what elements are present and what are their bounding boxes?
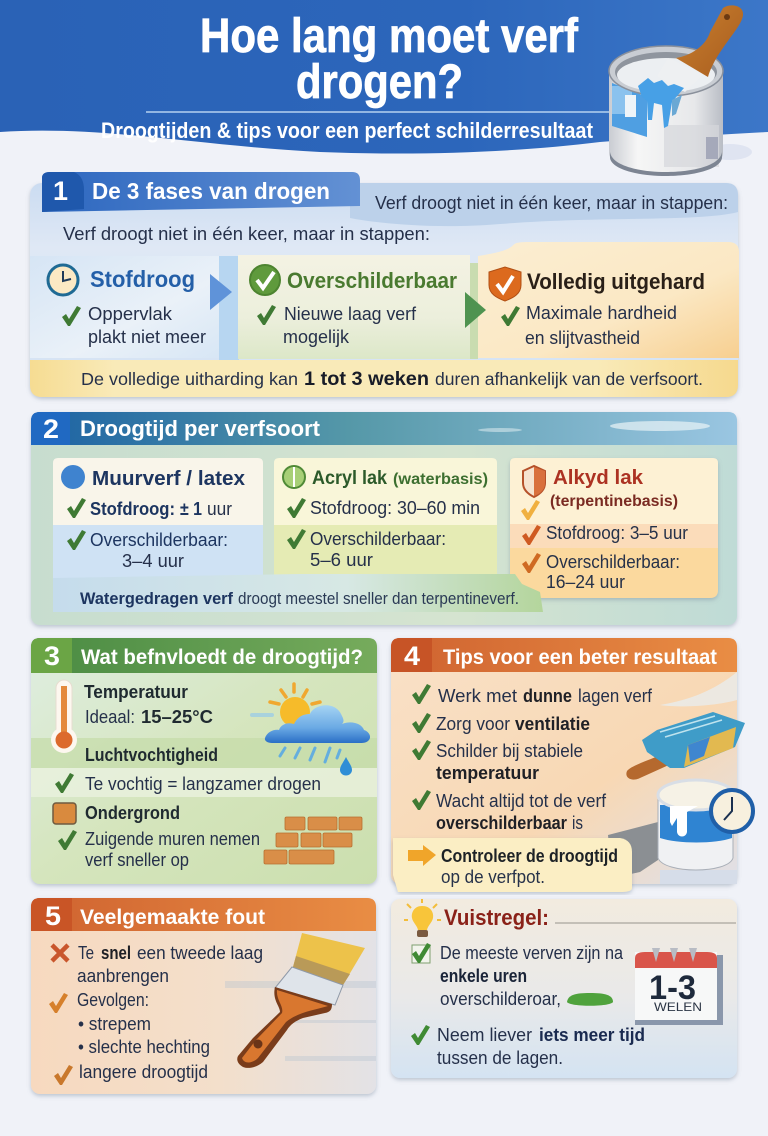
icon: red cross — [52, 945, 68, 961]
title: drogen? — [296, 56, 463, 109]
callout: watergedragen verf — [53, 574, 543, 612]
icon: green check — [250, 265, 280, 295]
icon: thermometer — [51, 680, 77, 753]
icon: leaf — [283, 466, 305, 488]
panel 5: veelgemaakte fout: langere droogtijd — [79, 1062, 208, 1082]
section heading — [31, 638, 377, 673]
icon: clock — [48, 265, 78, 295]
callout: controleer de droogtijd: Controleer de droogtijd — [441, 846, 618, 866]
panel 5: veelgemaakte fout: • strepem — [78, 1014, 151, 1034]
card: muurverf latex: ± 1 — [180, 499, 202, 519]
card: overschilderbaar: Nieuwe laag verf — [284, 304, 417, 324]
arrow: overschilderbaar to uitgehard — [465, 292, 486, 328]
card: acryl lak: Acryl lak — [312, 468, 387, 489]
icon: paint can with brush — [609, 5, 752, 176]
checklist tips: Wacht altijd tot de verf — [436, 791, 607, 811]
panel 3: wat beinvloedt de droogtijd: Zuigende muren nemen — [85, 829, 260, 849]
card: muurverf latex — [53, 458, 263, 578]
icon: bricks — [264, 817, 362, 864]
icon: paint pot with clock — [658, 780, 753, 870]
card: acryl lak: 5–6 uur — [310, 550, 373, 570]
panel 5: veelgemaakte fout: een tweede laag — [137, 943, 263, 963]
card: acryl lak: Overschilderbaar: — [310, 529, 446, 549]
checklist tips — [412, 684, 653, 833]
panel 1: de 3 fases van drogen — [30, 172, 739, 397]
panel 6: vuistregel — [391, 899, 737, 1078]
card: muurverf latex: Stofdroog: — [90, 499, 175, 519]
panel 5: veelgemaakte fout: • slechte hechting — [78, 1037, 210, 1057]
panel 3: wat beinvloedt de droogtijd: verf sneller op — [85, 850, 189, 870]
callout: volledige uitharding — [30, 360, 738, 397]
card: muurverf latex: Muurverf / latex — [92, 468, 245, 490]
panel 3: wat beinvloedt de droogtijd: Ideaal: — [85, 707, 135, 727]
arrow: stofdroog to overschilderbaar — [210, 274, 232, 310]
section heading: 5 — [45, 901, 61, 931]
card: alkyd lak: Alkyd lak — [553, 467, 644, 489]
panel 5: veelgemaakte fout: Te — [78, 943, 94, 963]
green paint swatch — [567, 993, 613, 1006]
icon: shield — [523, 466, 545, 497]
panel 2: droogtijd per verfsoort — [31, 412, 737, 625]
card: volledig uitgehard: en slijtvastheid — [525, 328, 640, 348]
section heading — [391, 638, 737, 672]
checklist tips: ventilatie — [515, 714, 590, 734]
card: muurverf latex: 3–4 uur — [122, 551, 184, 571]
panel 6: vuistregel: De meeste verven zijn na — [440, 943, 624, 963]
section heading: Veelgemaakte fout — [80, 906, 265, 929]
card: alkyd lak: Overschilderbaar: — [546, 552, 680, 572]
section heading: 4 — [404, 641, 420, 671]
section heading — [31, 898, 376, 931]
icon: calendar 1-3 weken — [635, 948, 723, 1025]
checklist tips: lagen verf — [578, 686, 653, 706]
title — [200, 10, 579, 109]
panel 3: wat beinvloedt de droogtijd: Temperatuur — [84, 682, 188, 702]
panel 5: veelgemaakte fout: snel — [101, 943, 131, 963]
callout: volledige uitharding: De volledige uitharding kan — [81, 369, 298, 389]
section heading tab: De 3 fases van drogen — [92, 178, 330, 204]
icon: blue drop — [61, 465, 85, 489]
callout: volledige uitharding: 1 tot 3 weken — [304, 368, 429, 390]
card: acryl lak — [274, 458, 497, 578]
icon: checkbox — [412, 943, 431, 963]
card: volledig uitgehard — [478, 242, 739, 358]
panel 3: wat beinvloedt de droogtijd: Ondergrond — [85, 803, 180, 823]
card: alkyd lak — [510, 458, 718, 598]
panel 6: vuistregel: tussen de lagen. — [437, 1048, 563, 1068]
checklist tips: Schilder bij stabiele — [436, 741, 583, 761]
callout: controleer de droogtijd: op de verfpot. — [441, 867, 545, 887]
icon: calendar 1-3 weken: 1-3 — [649, 969, 696, 1007]
callout: controleer de droogtijd — [393, 838, 632, 892]
section heading: Tips voor een beter resultaat — [443, 646, 717, 669]
checklist tips: overschilderbaar — [436, 813, 567, 833]
concrete block — [608, 822, 658, 878]
callout: watergedragen verf: droogt meestel sneller dan terpentineverf. — [238, 590, 519, 608]
panel 6: vuistregel: iets meer tijd — [539, 1025, 645, 1045]
section heading: 2 — [43, 414, 59, 444]
card: overschilderbaar — [238, 255, 478, 359]
checklist tips: dunne — [523, 686, 572, 706]
section heading tab — [42, 172, 360, 212]
card: alkyd lak: 16–24 uur — [546, 572, 625, 592]
card: volledig uitgehard: Volledig uitgehard — [527, 269, 705, 294]
section heading tab: 1 — [53, 176, 68, 206]
card: acryl lak: (waterbasis) — [393, 471, 488, 488]
section heading: Droogtijd per verfsoort — [80, 416, 321, 441]
panel 5: veelgemaakte fout: aanbrengen — [77, 966, 169, 986]
section heading — [31, 412, 737, 445]
panel 6: vuistregel: Vuistregel: — [444, 905, 549, 930]
card: stofdroog: plakt niet meer — [88, 327, 206, 347]
section heading: Wat befnvloedt de droogtijd? — [81, 646, 363, 669]
checklist tips: Zorg voor — [436, 714, 510, 734]
panel 3: wat beinvloedt de droogtijd: 15–25°C — [141, 707, 213, 727]
subtitle: Droogtijden & tips voor een perfect schilderresultaat — [101, 118, 594, 143]
icon: brick square — [53, 803, 76, 824]
panel 5: veelgemaakte fout: Gevolgen: — [77, 990, 149, 1010]
card: alkyd lak: (terpentinebasis) — [550, 493, 678, 510]
panel 3: wat beinvloedt de droogtijd: Luchtvochtigheid — [85, 745, 218, 765]
icon: paint brush — [237, 933, 365, 1068]
panel 6: vuistregel: overschilderoar, — [440, 989, 561, 1009]
icon: light bulb — [404, 899, 441, 937]
panel 3: wat beinvloedt de droogtijd — [31, 638, 377, 884]
panel 3: wat beinvloedt de droogtijd: Te vochtig = langzamer drogen — [85, 774, 321, 794]
panel 6: vuistregel: enkele uren — [440, 966, 527, 986]
section heading: 3 — [44, 641, 60, 671]
callout: watergedragen verf: Watergedragen verf — [80, 589, 233, 608]
panel 6: vuistregel: Neem liever — [437, 1025, 532, 1045]
arrow — [408, 845, 436, 866]
card: muurverf latex: Overschilderbaar: — [90, 530, 228, 550]
card: stofdroog — [30, 256, 239, 360]
intro text right: Verf droogt niet in één keer, maar in stappen: — [375, 193, 728, 213]
card: acryl lak: Stofdroog: 30–60 min — [310, 498, 480, 518]
icon: orange shield — [489, 267, 521, 301]
icon: sun, cloud and rain — [252, 684, 370, 776]
card: overschilderbaar: mogelijk — [283, 327, 350, 347]
card: stofdroog: Oppervlak — [88, 304, 173, 324]
card: muurverf latex: uur — [207, 499, 232, 519]
checklist tips: temperatuur — [436, 763, 539, 783]
panel 5: veelgemaakte fout — [31, 898, 376, 1094]
checklist tips: is — [572, 813, 583, 833]
callout: volledige uitharding: duren afhankelijk van de verfsoort. — [435, 369, 703, 389]
icon: paint roller — [626, 712, 745, 780]
intro text left: Verf droogt niet in één keer, maar in stappen: — [63, 224, 430, 244]
card: overschilderbaar: Overschilderbaar — [287, 268, 457, 293]
panel 4: tips voor een beter resultaat — [391, 638, 753, 892]
header banner — [0, 0, 768, 154]
title: Hoe lang moet verf — [200, 10, 579, 63]
card: volledig uitgehard: Maximale hardheid — [526, 303, 677, 323]
card: alkyd lak: Stofdroog: 3–5 uur — [546, 523, 688, 543]
icon: calendar 1-3 weken: WELEN — [654, 1000, 702, 1014]
card: stofdroog: Stofdroog — [90, 266, 195, 292]
checklist tips: Werk met — [438, 686, 517, 706]
